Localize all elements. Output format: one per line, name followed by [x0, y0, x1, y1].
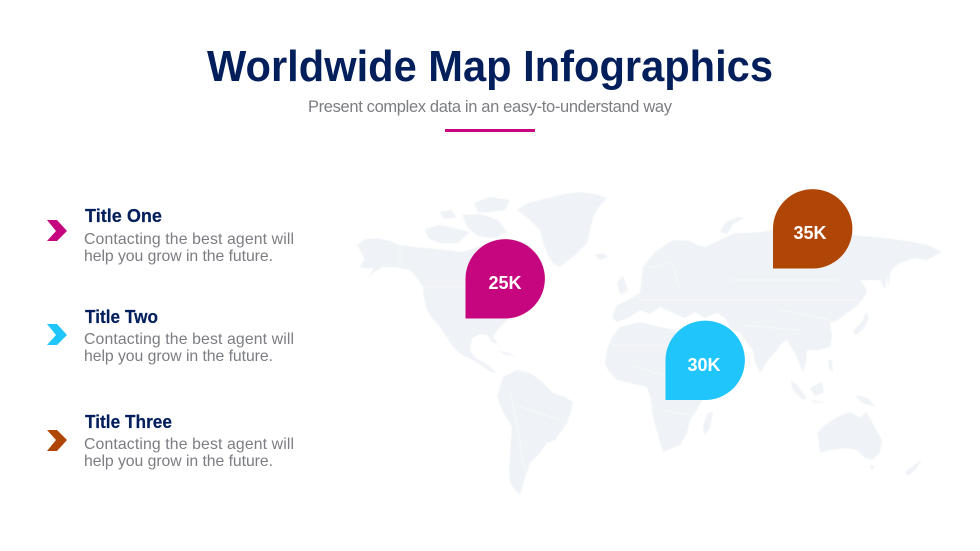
Philippines	[828, 360, 833, 372]
text: Title Three description: help you grow in the future.	[84, 453, 273, 470]
heading: Title One: Title One	[85, 205, 162, 226]
Indonesia	[790, 380, 807, 400]
heading: Title Two: Title Two	[85, 306, 158, 327]
list item: Title Two	[47, 306, 294, 365]
text: Title One description: Contacting the best agent will	[84, 231, 294, 248]
text: Title Two description: help you grow in the future.	[84, 348, 273, 365]
pin: 25K	[466, 239, 545, 318]
list item: Title Three	[47, 411, 294, 470]
Africa	[605, 322, 720, 452]
icon: rust chevron	[47, 430, 67, 451]
North America	[357, 238, 543, 373]
Central American islands	[497, 350, 516, 356]
pin: 30K: 30K	[687, 355, 721, 375]
pin: 35K	[773, 189, 852, 268]
Australia	[817, 412, 882, 460]
heading: Title Three: Title Three	[85, 411, 172, 432]
Madagascar	[703, 412, 713, 435]
list item: Title One	[47, 205, 294, 265]
Japan	[853, 312, 869, 335]
title: Worldwide Map Infographics	[207, 42, 773, 91]
title underline	[445, 129, 535, 132]
Iceland	[595, 253, 608, 260]
Arctic islands	[425, 225, 470, 243]
text: Title Three description: Contacting the best agent will	[84, 436, 294, 453]
text: Title Two description: Contacting the best agent will	[84, 331, 294, 348]
Novaya Zemlya	[720, 217, 745, 234]
pin: 35K: 35K	[793, 223, 827, 243]
Sakhalin	[887, 260, 895, 288]
Eurasia	[612, 225, 942, 373]
world map	[357, 192, 942, 495]
pin: 30K	[666, 321, 745, 400]
pin: 25K: 25K	[488, 273, 522, 293]
Tasmania	[870, 465, 875, 470]
icon: cyan chevron	[47, 324, 67, 345]
Greenland	[517, 192, 607, 267]
icon: magenta chevron	[47, 220, 67, 241]
UK	[617, 276, 628, 295]
text: Title One description: help you grow in the future.	[84, 248, 273, 265]
New Zealand	[905, 460, 922, 476]
South America	[497, 370, 573, 495]
subtitle: Present complex data in an easy-to-understand way	[308, 98, 673, 116]
